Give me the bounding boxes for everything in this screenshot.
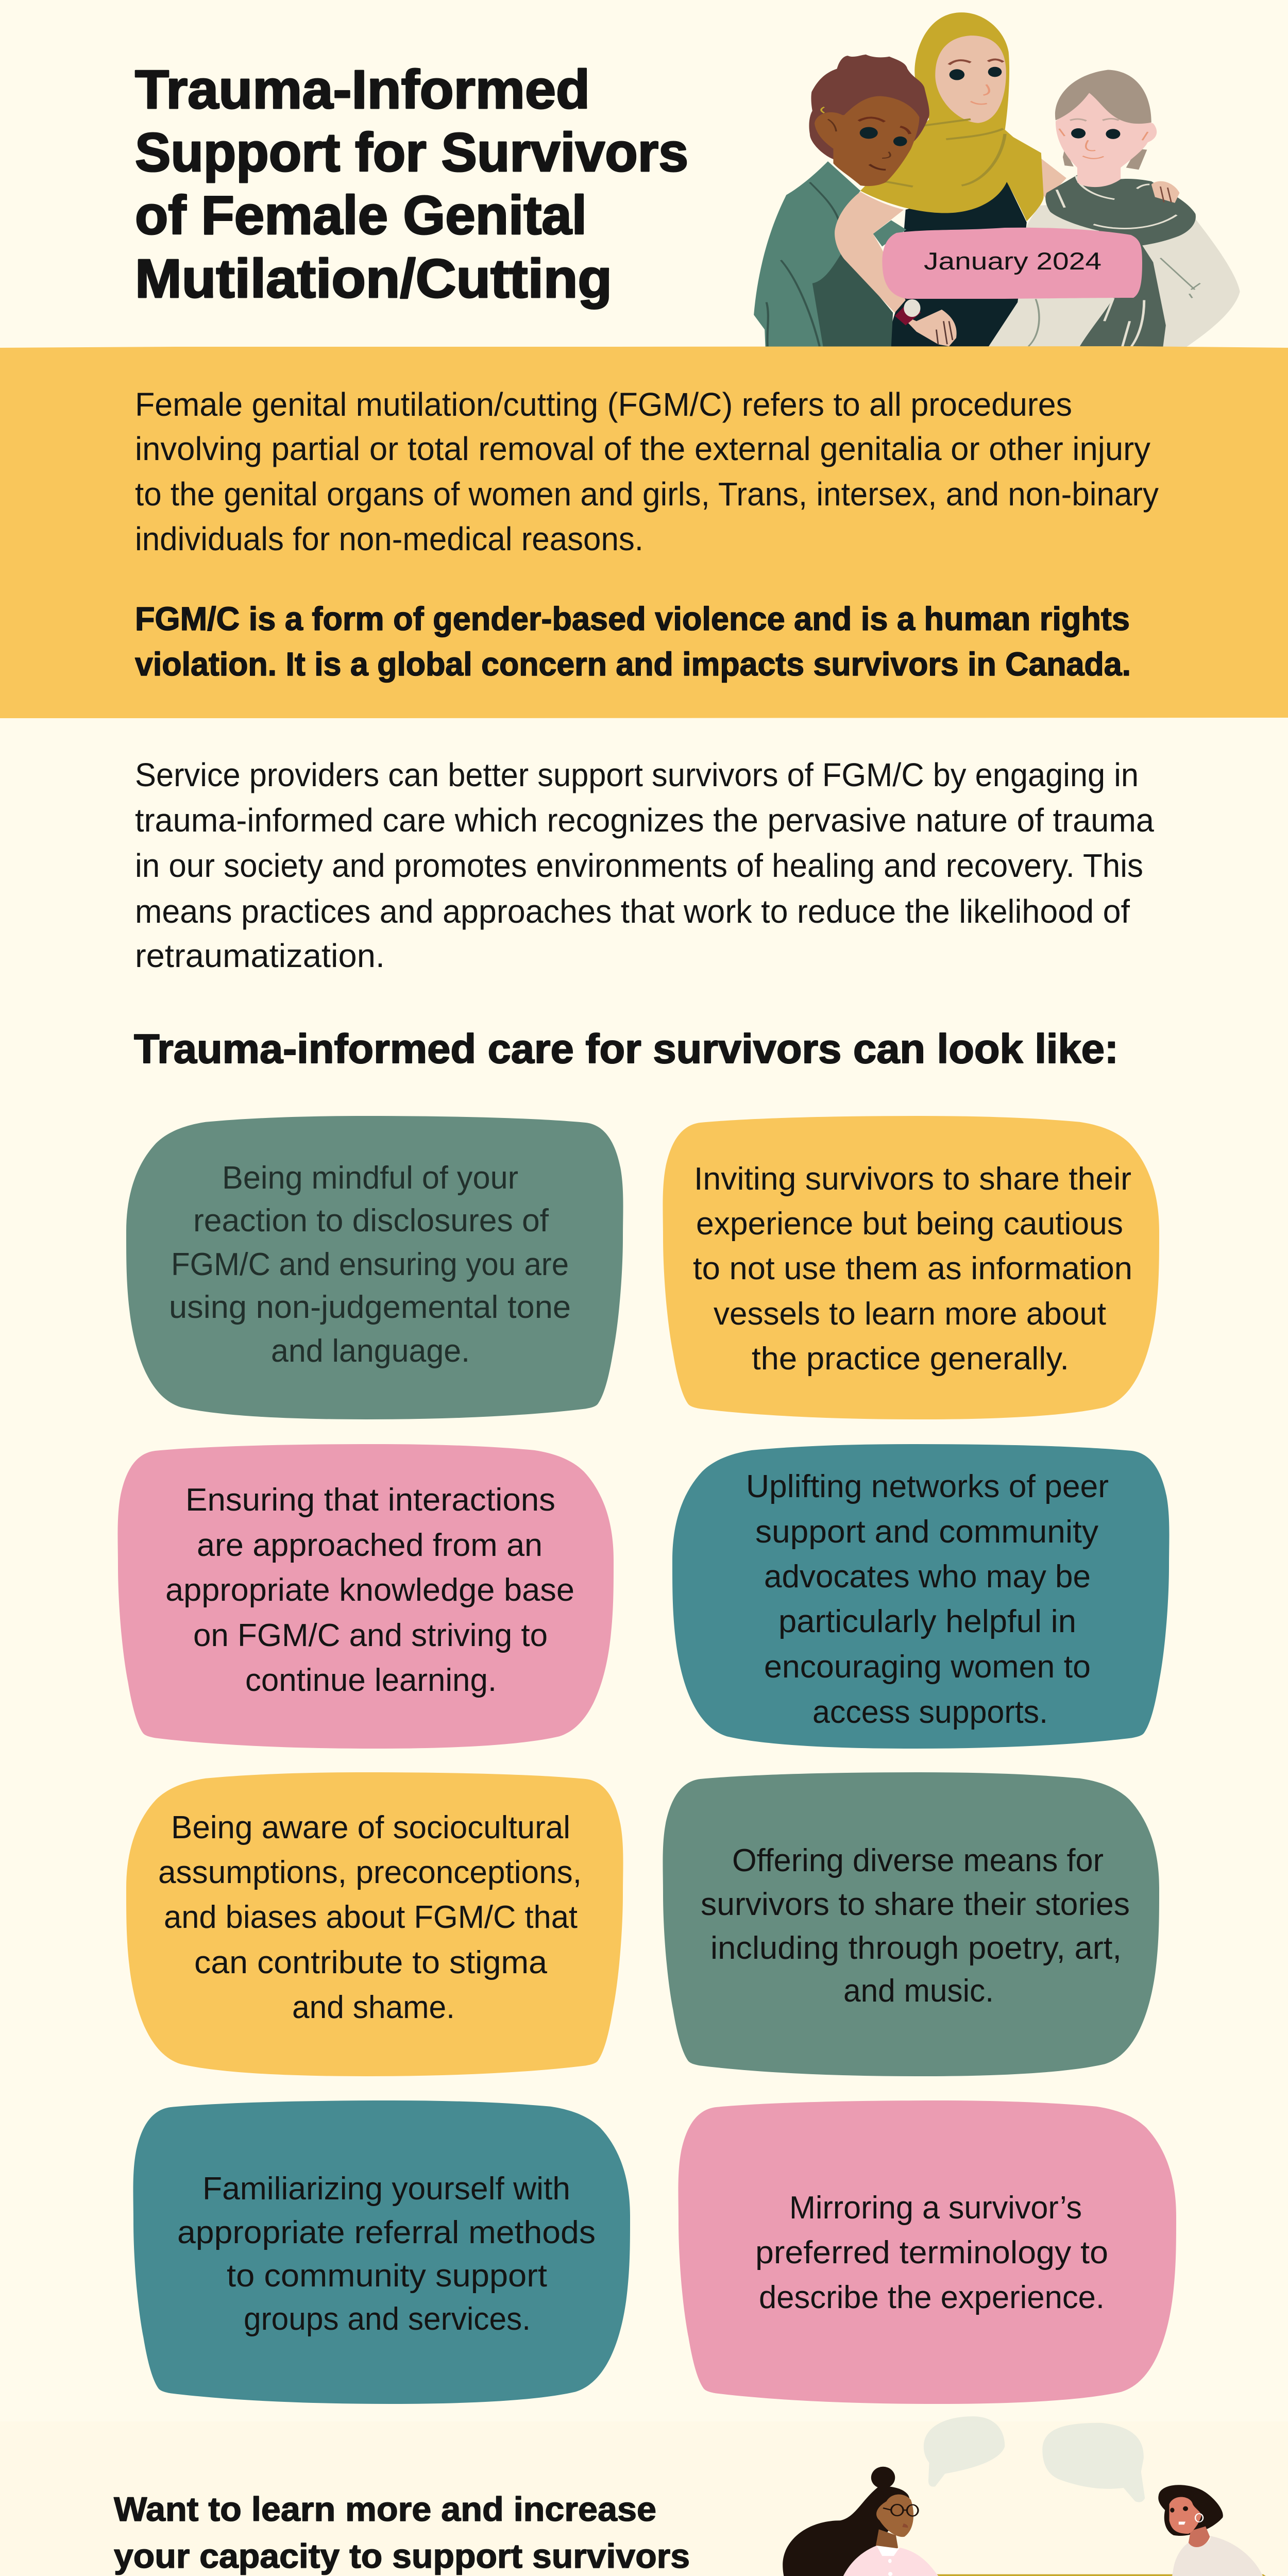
card: peer support: advocates who may be bbox=[764, 1559, 1091, 1595]
title: of Female Genital bbox=[135, 185, 587, 246]
card: knowledge base: Ensuring that interactions bbox=[185, 1482, 555, 1518]
call to action heading bbox=[114, 2490, 690, 2576]
card: mirroring terminology: describe the experience. bbox=[759, 2280, 1105, 2315]
card: referral methods: Familiarizing yourself with bbox=[202, 2171, 570, 2207]
card: sociocultural assumptions: can contribute to stigma bbox=[194, 1945, 548, 1980]
card: knowledge base: are approached from an bbox=[197, 1528, 543, 1563]
card: diverse means: Offering diverse means for bbox=[732, 1843, 1104, 1878]
call to action heading: your capacity to support survivors bbox=[114, 2537, 690, 2575]
card: inviting survivors bbox=[663, 1116, 1159, 1419]
card: peer support: support and community bbox=[755, 1514, 1098, 1550]
service provider paragraph: Service providers can better support survivors of FGM/C by engaging in bbox=[135, 756, 1139, 793]
panel: definition band bbox=[0, 346, 1288, 718]
illustration: two women on couch bbox=[661, 2416, 1288, 2576]
card: sociocultural assumptions: and biases about FGM/C that bbox=[164, 1900, 578, 1935]
card: inviting survivors: vessels to learn more about bbox=[714, 1296, 1106, 1332]
card: diverse means: survivors to share their stories bbox=[701, 1887, 1130, 1922]
title: Support for Survivors bbox=[135, 122, 688, 183]
card: diverse means bbox=[663, 1772, 1159, 2076]
illustration: three women bbox=[754, 12, 1240, 347]
service provider paragraph: in our society and promotes environments of healing and recovery. This bbox=[135, 847, 1143, 884]
card: mindful reaction bbox=[126, 1116, 623, 1419]
key statement: FGM/C is a form of gender-based violence and is a human rights bbox=[135, 600, 1130, 637]
title: Mutilation/Cutting bbox=[135, 248, 612, 309]
card: mindful reaction: using non-judgemental tone bbox=[169, 1290, 571, 1325]
card: peer support: Uplifting networks of peer bbox=[746, 1469, 1109, 1504]
title bbox=[135, 59, 688, 309]
card: mirroring terminology: Mirroring a survivor’s bbox=[789, 2190, 1082, 2226]
title: Trauma-Informed bbox=[135, 59, 590, 120]
service provider paragraph bbox=[135, 756, 1154, 974]
definition text bbox=[135, 386, 1159, 557]
card: sociocultural assumptions: Being aware of sociocultural bbox=[171, 1810, 570, 1845]
card: peer support: encouraging women to bbox=[764, 1649, 1091, 1685]
card: inviting survivors: the practice generally. bbox=[752, 1341, 1069, 1377]
card: knowledge base: appropriate knowledge base bbox=[165, 1572, 574, 1608]
card: knowledge base bbox=[117, 1444, 614, 1749]
card: referral methods: to community support bbox=[227, 2258, 547, 2294]
card: referral methods bbox=[133, 2100, 630, 2404]
service provider paragraph: means practices and approaches that work to reduce the likelihood of bbox=[135, 893, 1130, 930]
card: inviting survivors: experience but being cautious bbox=[696, 1206, 1123, 1242]
card: peer support: particularly helpful in bbox=[778, 1604, 1076, 1639]
card: mindful reaction: reaction to disclosures of bbox=[193, 1203, 549, 1239]
card: diverse means: including through poetry, art, bbox=[710, 1930, 1122, 1966]
date badge: January 2024 bbox=[924, 247, 1101, 275]
card: sociocultural assumptions bbox=[126, 1772, 623, 2076]
date badge bbox=[882, 228, 1142, 299]
service provider paragraph: retraumatization. bbox=[135, 937, 385, 974]
heading: trauma-informed care: Trauma-informed care for survivors can look like: bbox=[134, 1026, 1118, 1072]
card: mirroring terminology bbox=[678, 2100, 1176, 2404]
card: peer support: access supports. bbox=[812, 1694, 1048, 1730]
definition text: to the genital organs of women and girls, Trans, intersex, and non-binary bbox=[135, 476, 1159, 513]
card: diverse means: and music. bbox=[843, 1973, 994, 2009]
definition text: involving partial or total removal of the external genitalia or other injury bbox=[135, 430, 1150, 467]
key statement bbox=[135, 600, 1131, 683]
definition text: Female genital mutilation/cutting (FGM/C) refers to all procedures bbox=[135, 386, 1072, 423]
card: mindful reaction: and language. bbox=[271, 1333, 470, 1369]
definition text: individuals for non-medical reasons. bbox=[135, 520, 643, 557]
card: referral methods: appropriate referral methods bbox=[177, 2215, 596, 2250]
key statement: violation. It is a global concern and impacts survivors in Canada. bbox=[135, 646, 1131, 683]
card: mirroring terminology: preferred terminology to bbox=[755, 2235, 1108, 2270]
call to action heading: Want to learn more and increase bbox=[114, 2490, 656, 2528]
card: mindful reaction: FGM/C and ensuring you are bbox=[171, 1247, 569, 1282]
service provider paragraph: trauma-informed care which recognizes the pervasive nature of trauma bbox=[135, 802, 1154, 839]
card: referral methods: groups and services. bbox=[244, 2301, 531, 2337]
card: inviting survivors: Inviting survivors to share their bbox=[694, 1161, 1131, 1197]
card: sociocultural assumptions: assumptions, preconceptions, bbox=[158, 1855, 582, 1890]
card: inviting survivors: to not use them as information bbox=[693, 1251, 1132, 1286]
card: knowledge base: on FGM/C and striving to bbox=[193, 1618, 548, 1653]
card: sociocultural assumptions: and shame. bbox=[292, 1990, 455, 2025]
card: peer support bbox=[672, 1444, 1170, 1749]
card: mindful reaction: Being mindful of your bbox=[222, 1160, 518, 1196]
card: knowledge base: continue learning. bbox=[245, 1663, 497, 1698]
